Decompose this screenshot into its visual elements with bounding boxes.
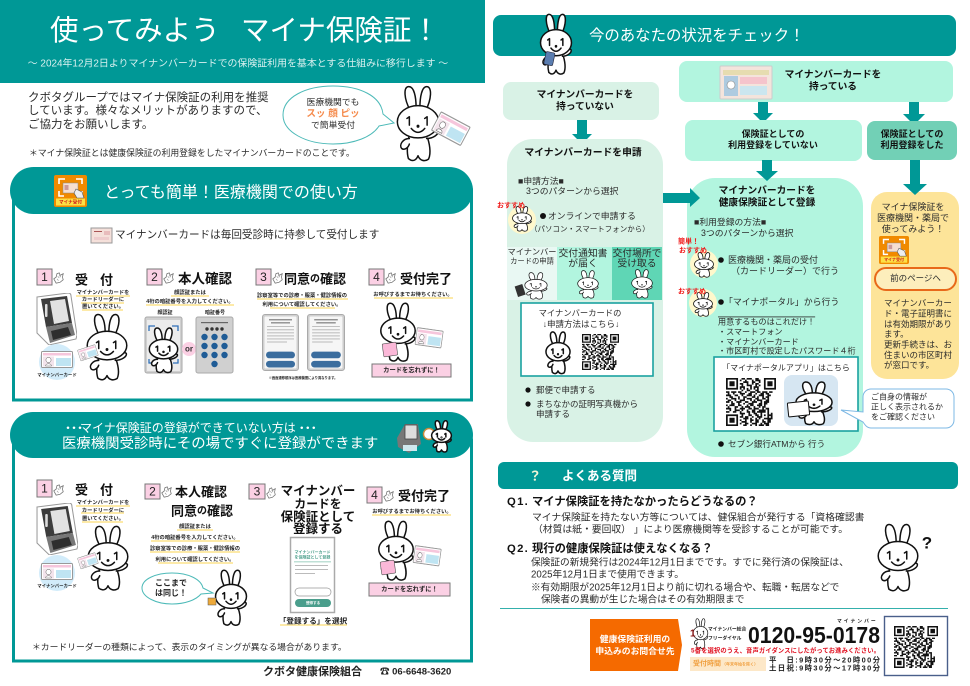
contact label: 健康保険証利用の <box>600 633 670 644</box>
FAQ Q1: （材質は紙・要回収） 」により医療機関等を受診することが可能です。 <box>533 522 848 536</box>
arrow: not registered to register <box>756 160 778 181</box>
QR box: how to apply: マイナンバーカードの <box>539 308 621 318</box>
flow: registered as insurance card <box>867 121 957 160</box>
FAQ Q2: 保険証の新規発行は2024年12月1日までです。すでに発行済の保険証は、 <box>531 556 849 568</box>
step banners: 交付場所で <box>613 246 662 260</box>
FAQ heading bar: よくある質問 <box>562 468 637 483</box>
renewal note: が窓口です。 <box>884 360 934 370</box>
free dial: 1 <box>690 628 696 640</box>
footer: organisation contact: ☎ 06-6648-3620 <box>380 666 451 678</box>
step 3: register as insurance card: マイナンバー <box>281 484 355 498</box>
items needed: ・市区町村で設定したパスワード４桁 <box>718 346 856 356</box>
reception hours: （年末年始を除く） <box>722 660 758 666</box>
panel: use it: 使ってみよう！ <box>882 223 944 234</box>
step 4: reception complete: カードを忘れずに！ <box>381 584 438 593</box>
step 2: identity and consent: 2 <box>149 484 156 498</box>
speech bubble: same so far: は同じ！ <box>155 588 187 598</box>
footnote: reader differences: ＊カードリーダーの種類によって、表示のタイミングが異なる場合があります。 <box>32 641 347 652</box>
step 3: register as insurance card: 登録する <box>293 521 343 536</box>
method: ATM: セブン銀行ATMから 行う <box>728 438 825 449</box>
callout: confirm information: ご自身の情報が <box>871 392 927 402</box>
free dial: フリーダイヤル <box>708 634 742 642</box>
FAQ Q2: 保険者の異動が生じた場合はその有効期限まで <box>541 592 744 606</box>
reception hours <box>690 656 881 672</box>
method: myna portal <box>678 286 839 317</box>
icon: myna reception: マイナ受付 <box>59 198 82 206</box>
step 3: register as insurance card: カードを <box>294 497 342 511</box>
method: card reader: 医療機関・薬局の受付 <box>728 254 818 265</box>
step 2: identity and consent: 顔認証または <box>179 522 212 530</box>
step 1: reception: マイナンバーカード <box>37 582 77 590</box>
reception hours: 土日祝:9時30分～17時30分 <box>769 664 881 672</box>
step 1: reception: 付 <box>100 482 113 498</box>
arrow: apply to register <box>663 188 700 207</box>
step 2: identity and consent: 診察室等での診療・服薬・健診情報の <box>150 544 240 552</box>
panel: use it <box>871 192 959 379</box>
contact label <box>590 619 682 671</box>
panel: apply for card <box>497 139 663 442</box>
step banners: 受け取る <box>617 258 657 270</box>
step 4: reception complete: お呼びするまでお待ちください。 <box>373 290 453 298</box>
FAQ Q1: マイナ保険証を持たない方等については、健保組合が発行する「資格確認書 <box>532 510 865 524</box>
step 3: consent check: ※画面遷移順序は医療機関により異なります。 <box>269 375 337 380</box>
other application methods: 申請する <box>536 409 570 419</box>
method: card reader: （カードリーダー）で行う <box>731 265 839 276</box>
free dial: 5番を選択のうえ、音声ガイダンスにしたがってお進みください。 <box>691 646 880 654</box>
step 2: identity and consent: 利用について確認してください。 <box>156 555 234 563</box>
panel heading: とっても簡単！医療機関での使い方 <box>104 184 358 202</box>
step 4: reception complete: 受付完了 <box>400 272 452 286</box>
FAQ Q2: 現行の健康保険証は使えなくなる？ <box>532 541 713 555</box>
step 4: reception complete: お呼びするまでお待ちください。 <box>372 507 452 515</box>
step banners: マイナンバー <box>508 248 556 256</box>
arrow: no card to apply <box>572 120 592 144</box>
step 2: identity and consent: 同意の確認 <box>171 504 233 518</box>
reminder: bring card: マイナンバーカードは毎回受診時に持参して受付します <box>115 228 379 241</box>
QR box: how to apply: ↓申請方法はこちら↓ <box>543 319 619 329</box>
method: card reader: おすすめ <box>679 246 707 254</box>
button: previous page: 前のページへ <box>890 273 941 283</box>
QR box: myna portal app <box>714 357 858 431</box>
FAQ Q2: Q2. <box>507 543 529 555</box>
step 1: reception: 置いてください。 <box>82 302 124 310</box>
step 1: reception: 1 <box>41 270 48 284</box>
QR code: contact <box>884 616 948 676</box>
step 2: identity check: 顔認証 <box>157 309 173 316</box>
panel: register as insurance card: 健康保険証として登録 <box>719 196 816 208</box>
FAQ Q2 <box>507 541 849 606</box>
contact label: 申込みのお問合せ先 <box>595 645 675 656</box>
mascot holding card <box>397 87 470 161</box>
panel: use it: マイナ保険証を <box>882 201 944 212</box>
button: previous page <box>875 268 956 290</box>
panel heading: 医療機関受診時にその場ですぐに登録ができます <box>62 435 378 452</box>
flow: has card: マイナンバーカードを <box>785 68 881 80</box>
step 1: reception: 1 <box>41 482 48 496</box>
QR box: how to apply <box>521 303 653 376</box>
step 2: identity and consent: 4桁の暗証番号を入力してください。 <box>151 533 239 541</box>
phone screen: マイナンバーカード <box>295 548 330 554</box>
items needed <box>718 316 856 356</box>
items needed: ・スマートフォン <box>718 328 783 336</box>
step 3: consent check: 診察室等での診療・服薬・健診情報の <box>257 291 347 299</box>
note: definition: ＊マイナ保険証とは健康保険証の利用登録をしたマイナンバーカードのことです。 <box>29 147 355 158</box>
step 3: register as insurance card: 保険証として <box>281 510 355 524</box>
online application: オンラインで申請する <box>548 210 636 221</box>
step 1: reception: 置いてください。 <box>82 514 124 522</box>
intro text: クボタグループではマイナ保険証の利用を推奨 <box>28 90 269 104</box>
panel: apply for card: マイナンバーカードを申請 <box>524 146 642 158</box>
online application: （パソコン・スマートフォンから） <box>530 224 650 234</box>
callout: confirm information: をご確認ください <box>871 412 935 422</box>
other application methods: 郵便で申請する <box>536 385 596 395</box>
step 1: reception: マイナンバーカードを <box>77 288 129 296</box>
step 1: reception: 受 <box>75 482 88 498</box>
step 2: identity check: 4桁の暗証番号を入力してください。 <box>146 297 234 305</box>
arrow: has card to not registered <box>753 102 773 123</box>
free dial: マイナンバー総合 <box>708 626 746 632</box>
renewal note: 住まいの市区町村 <box>884 350 953 360</box>
flow: no card: 持っていない <box>556 100 614 112</box>
step 2: identity check: or <box>185 344 193 354</box>
flow: not registered as insurance card <box>685 120 862 161</box>
intro text <box>28 90 269 131</box>
flow: has card <box>679 61 953 102</box>
arrow: has card to registered <box>903 102 925 125</box>
panel heading: ・・・マイナ保険証の登録ができていない方は・・・ <box>62 420 316 435</box>
speech bubble: quick reception: スッ 顔 ピッ <box>306 108 360 120</box>
speech bubble: quick reception: 医療機関でも <box>307 96 359 107</box>
step 1: reception: 受 <box>75 272 88 288</box>
panel: register at medical institution <box>10 412 473 661</box>
items needed: ・マイナンバーカード <box>718 338 799 346</box>
online application: おすすめ <box>497 200 525 210</box>
step 1: reception: カードリーダーに <box>82 506 124 514</box>
other application methods: まちなかの証明写真機から <box>536 399 638 409</box>
phone screen: を保険証として登録 <box>295 554 330 560</box>
step 1: reception: マイナンバーカードを <box>77 498 129 506</box>
speech bubble: quick reception <box>283 86 394 144</box>
panel heading <box>10 167 473 214</box>
flow: no card <box>503 82 659 120</box>
speech bubble: same so far: ここまで <box>155 578 187 588</box>
FAQ Q1: Q1. <box>507 496 529 508</box>
panel: how to use at medical institutions <box>10 167 473 400</box>
step 1: reception <box>37 269 130 380</box>
step 4: reception complete <box>369 269 453 377</box>
intro text: ご協力をお願いします。 <box>28 117 153 131</box>
step 1: reception: マイナンバーカード <box>37 372 77 378</box>
step 1: reception <box>37 480 130 591</box>
step 1: reception: カードリーダーに <box>82 295 124 303</box>
footer: organisation contact: クボタ健康保険組合 <box>263 664 362 678</box>
mascot thinking: ? <box>922 534 932 552</box>
contact divider <box>500 608 948 609</box>
panel: apply for card: 3つのパターンから選択 <box>526 185 619 196</box>
phone screen: 登録する <box>306 600 321 605</box>
title: 使ってみよう <box>50 15 220 47</box>
renewal note: ド・電子証明書に <box>884 308 952 318</box>
method: myna portal: おすすめ <box>678 286 706 296</box>
flow: has card: 持っている <box>809 80 857 92</box>
step 2: identity check: 本人確認 <box>178 270 232 286</box>
panel: apply for card: ■申請方法■ <box>518 175 564 186</box>
flow: not registered as insurance card: 保険証としての <box>742 128 804 139</box>
step 2: identity check: 2 <box>151 270 158 284</box>
FAQ heading bar <box>498 462 958 489</box>
title <box>50 15 440 47</box>
step banners: 交付通知書 <box>559 246 608 260</box>
callout: confirm information <box>841 389 954 428</box>
step 2: identity check: 顔認証または <box>174 288 207 296</box>
step 4: reception complete: カードを忘れずに！ <box>383 365 440 374</box>
step 4: reception complete: 4 <box>373 270 380 284</box>
step 3: consent check: 3 <box>260 270 267 284</box>
step 1: reception: 付 <box>100 272 113 288</box>
flow: registered as insurance card: 保険証としての <box>881 128 943 139</box>
renewal note: は有効期限があり <box>884 319 952 329</box>
renewal note <box>884 298 953 370</box>
step 2: identity check <box>145 269 234 373</box>
flow: no card: マイナンバーカードを <box>537 88 633 100</box>
step 4: reception complete <box>367 487 452 596</box>
renewal note: マイナンバーカー <box>884 298 952 308</box>
method: card reader: 簡単！ <box>678 236 699 246</box>
panel: register as insurance card: 3つのパターンから選択 <box>701 227 794 238</box>
mascot thinking <box>878 524 932 591</box>
step 3: consent check: 利用について確認してください。 <box>263 300 341 308</box>
FAQ Q1: マイナ保険証を持たなかったらどうなるの？ <box>532 494 758 508</box>
free dial <box>690 618 880 654</box>
online application <box>497 200 650 234</box>
speech bubble: quick reception: で簡単受付 <box>311 119 355 130</box>
items needed: 用意するものはこれだけ！ <box>718 316 815 326</box>
other application methods <box>525 385 638 419</box>
step 3: register as insurance card <box>249 484 355 626</box>
icon: myna reception <box>879 236 909 264</box>
phone screen <box>290 538 334 612</box>
panel heading <box>10 412 473 458</box>
free dial: マイナンバー <box>837 618 878 624</box>
step 3: consent check <box>256 269 348 380</box>
icon: my number card <box>720 66 772 99</box>
renewal note: 更新手続きは、お <box>884 340 953 350</box>
step 3: register as insurance card: 3 <box>254 484 261 498</box>
intro text: しています。様々なメリットがありますので、 <box>28 103 268 117</box>
callout: confirm information: 正しく表示されるか <box>871 402 943 412</box>
FAQ Q2: 2025年12月1日まで使用できます。 <box>531 568 684 580</box>
panel: register as insurance card: マイナンバーカードを <box>719 184 815 196</box>
footer: organisation contact <box>263 664 451 678</box>
illustration: card reader and mascot <box>397 421 451 453</box>
step banners: が届く <box>568 256 598 270</box>
step banners <box>507 246 662 300</box>
step 2: identity and consent <box>142 484 246 625</box>
mascot with smartphone <box>541 14 571 74</box>
method: myna portal: 「マイナポータル」から行う <box>724 296 839 307</box>
panel: register as insurance card: ■利用登録の方法■ <box>694 216 766 227</box>
arrow: registered to use <box>903 160 927 195</box>
renewal note: ます。 <box>884 329 909 339</box>
panel: use it: 医療機関・薬局で <box>877 212 949 223</box>
step banners: カードの申請 <box>510 256 554 266</box>
panel: register as insurance card <box>678 178 863 457</box>
icon: myna reception: マイナ受付 <box>884 256 904 262</box>
FAQ Q1 <box>507 494 865 536</box>
flow: registered as insurance card: 利用登録をした <box>880 139 944 150</box>
step 3: register as insurance card: 「登録する」を選択 <box>279 616 348 626</box>
QR box: myna portal app: 「マイナポータルアプリ」はこちら <box>722 364 850 372</box>
free dial: 0120-95-0178 <box>748 622 880 648</box>
step 4: reception complete: 4 <box>371 488 378 502</box>
step 4: reception complete: 受付完了 <box>398 488 450 504</box>
method: card reader <box>678 236 839 278</box>
flow: not registered as insurance card: 利用登録をしていない <box>728 139 818 150</box>
right heading bar: 今のあなたの状況をチェック！ <box>589 26 804 44</box>
step 2: identity and consent: 本人確認 <box>175 484 227 500</box>
FAQ Q2: ※有効期限が2025年12月1日より前に切れる場合や、転職・転居などで <box>531 580 839 594</box>
speech bubble: same so far <box>142 573 213 604</box>
title: マイナ保険証！ <box>241 15 440 47</box>
reception hours: 平 日:9時30分～20時00分 <box>769 656 881 664</box>
right heading bar <box>493 15 956 56</box>
step 3: consent check: 同意の確認 <box>284 272 346 286</box>
FAQ heading bar: ？ <box>528 468 542 484</box>
header: title banner <box>0 0 485 83</box>
subtitle: ～ 2024年12月2日よりマイナンバーカードでの保険証利用を基本とする仕組みに移行します ～ <box>28 56 448 70</box>
icon: myna reception <box>54 175 87 207</box>
step 2: identity check: 暗証番号 <box>205 309 225 316</box>
reception hours: 受付時間 <box>693 658 721 668</box>
